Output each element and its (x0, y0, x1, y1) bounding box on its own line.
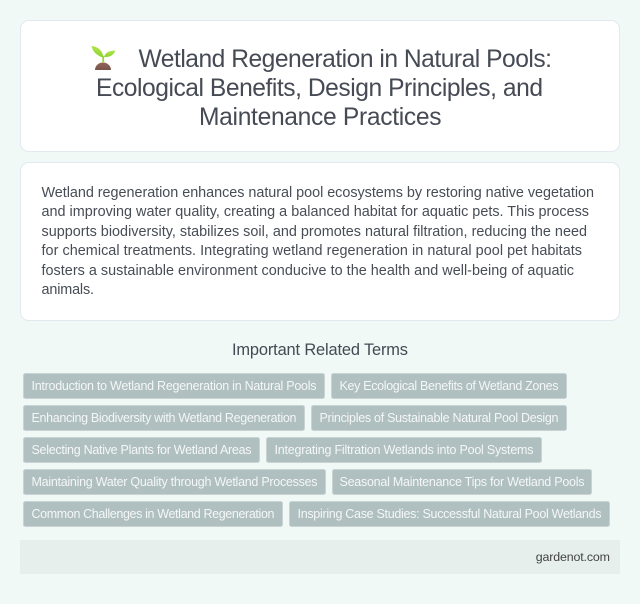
heading: important related terms: Important Related Terms (232, 341, 408, 359)
tag (312, 406, 566, 430)
title (96, 46, 552, 131)
tag: Key Ecological Benefits of Wetland Zones (340, 379, 558, 393)
tag (290, 502, 610, 526)
tag list (24, 374, 610, 526)
text block: description paragraph: Wetland regeneration enhances natural pool ecosystems by restoring native vegetation (42, 185, 594, 201)
tag: Integrating Filtration Wetlands into Pool Systems (274, 443, 534, 457)
text block: description paragraph: and improving water quality, creating a balanced habitat for aquatic pets. This process (42, 204, 589, 220)
tag (24, 502, 282, 526)
tag: Principles of Sustainable Natural Pool Design (320, 411, 559, 425)
tag: Selecting Native Plants for Wetland Areas (32, 443, 252, 457)
title: Wetland Regeneration in Natural Pools: (138, 46, 552, 73)
tag: Seasonal Maintenance Tips for Wetland Pools (340, 475, 584, 489)
text block: description paragraph: fosters a sustainable environment conducive to the health and well-being of aquatic (42, 263, 574, 279)
icon: sprout (92, 46, 115, 70)
tag (332, 374, 566, 398)
text block: description paragraph: supports biodiversity, stabilizes soil, and promotes natural filtration, reducing the need (42, 224, 587, 240)
title: Maintenance Practices (199, 104, 442, 131)
tag: Maintaining Water Quality through Wetland Processes (32, 475, 318, 489)
tag (24, 374, 324, 398)
text block: description paragraph: for chemical treatments. Integrating wetland regeneration in natural pool pet habitats (42, 243, 582, 259)
title: Ecological Benefits, Design Principles, and (96, 75, 543, 102)
text block: description paragraph (42, 185, 594, 298)
footer bar (20, 540, 620, 574)
tag: Inspiring Case Studies: Successful Natural Pool Wetlands (298, 507, 602, 521)
tag: Enhancing Biodiversity with Wetland Regeneration (32, 411, 297, 425)
tag: Introduction to Wetland Regeneration in Natural Pools (32, 379, 316, 393)
tag: Common Challenges in Wetland Regeneration (32, 507, 275, 521)
panel: description (20, 162, 620, 320)
tag (266, 438, 542, 462)
tag (24, 406, 304, 430)
tag (332, 470, 592, 494)
tag (24, 470, 326, 494)
panel: title header (20, 20, 620, 152)
tag (24, 438, 260, 462)
text block: description paragraph: animals. (42, 282, 94, 298)
footer source text: gardenot.com (536, 550, 610, 564)
